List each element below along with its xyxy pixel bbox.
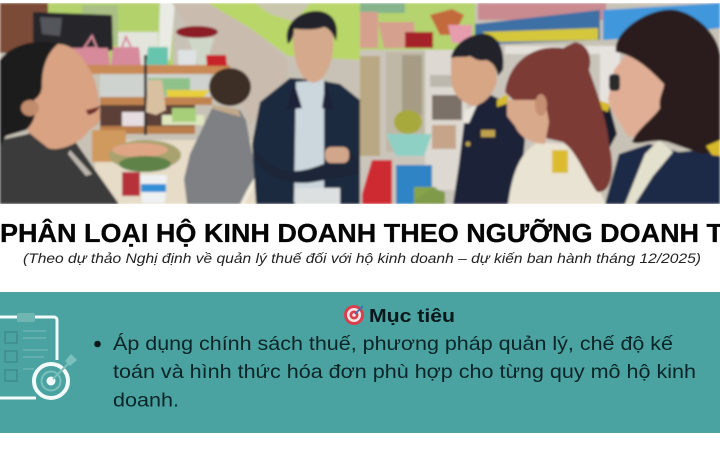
subtitle: (Theo dự thảo Nghị định về quản lý thuế đối với hộ kinh doanh – dự kiến ban hành tháng 12/2025) bbox=[23, 250, 701, 266]
title: PHÂN LOẠI HỘ KINH DOANH THEO NGƯỠNG DOANH THU bbox=[0, 218, 720, 248]
panel heading: Mục tiêu bbox=[369, 306, 455, 326]
shelves with goods bbox=[70, 26, 230, 162]
body text: Áp dụng chính sách thuế, phương pháp quản lý, chế độ kế bbox=[113, 332, 673, 355]
person: male tax officer bbox=[415, 34, 525, 204]
photo: tax officers talking with a shop owner bbox=[0, 3, 720, 204]
potted flowers bbox=[109, 140, 181, 203]
icon: clipboard with target bbox=[0, 313, 77, 398]
person: tax officer with red hair bbox=[505, 42, 617, 204]
body text: toán và hình thức hóa đơn phù hợp cho từng quy mô hộ kinh bbox=[113, 361, 696, 383]
person: female tax officer with glasses bbox=[605, 10, 720, 204]
panel: objective bbox=[0, 292, 720, 433]
body text bbox=[113, 332, 696, 412]
icon: target emoji bbox=[344, 305, 364, 325]
shop cabinets and top banners bbox=[360, 3, 720, 204]
person: man in navy jacket bbox=[252, 11, 360, 204]
person: customer in grey sweater bbox=[184, 68, 256, 204]
body text: doanh. bbox=[113, 390, 179, 412]
shop background: walls and staircase bbox=[0, 3, 360, 204]
television on the wall bbox=[33, 12, 113, 55]
bullet marker bbox=[94, 341, 101, 347]
person: woman in grey jacket bbox=[0, 42, 119, 204]
